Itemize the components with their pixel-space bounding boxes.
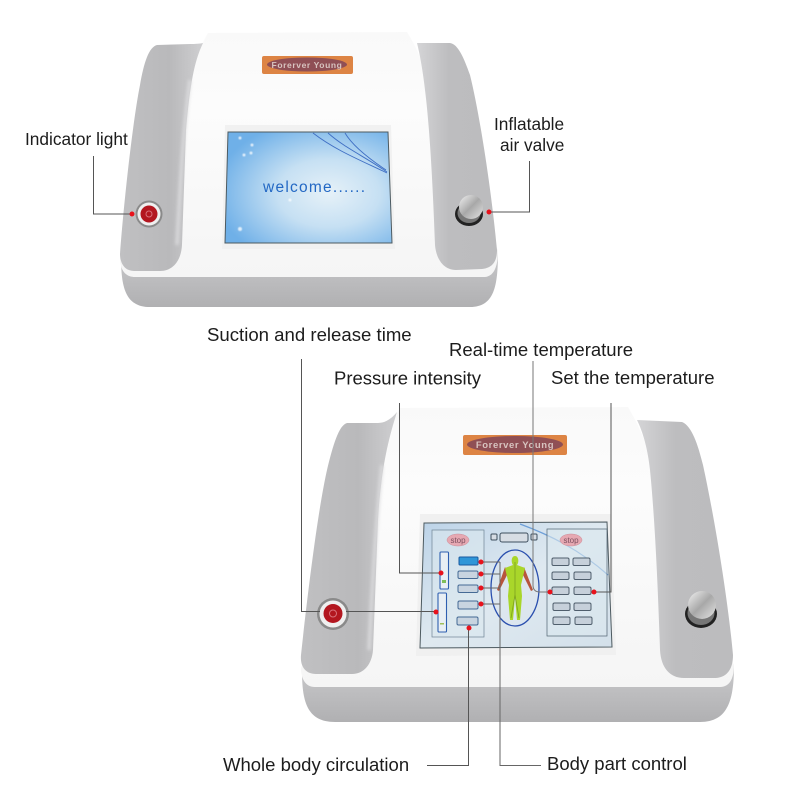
knob bbox=[685, 591, 717, 628]
callout dots bbox=[130, 210, 596, 630]
top centre controls bbox=[491, 533, 537, 542]
screen bezel bbox=[416, 514, 616, 656]
label: inflatable air valve: Inflatable bbox=[494, 114, 564, 134]
right stop button bbox=[560, 534, 582, 546]
left mode buttons bbox=[457, 557, 478, 625]
left stop button bbox=[447, 534, 469, 546]
screen swoosh lines bbox=[313, 133, 387, 173]
logo plate bbox=[262, 56, 353, 74]
right handle bbox=[417, 43, 497, 270]
right panel bbox=[547, 529, 607, 636]
sliders bbox=[438, 552, 448, 632]
logo plate bbox=[463, 435, 567, 455]
body oval bbox=[491, 550, 539, 626]
device white body bbox=[120, 32, 498, 277]
body figure bbox=[497, 556, 533, 620]
label: whole body circulation: Whole body circulation bbox=[223, 754, 409, 775]
label: real-time temperature: Real-time temperature bbox=[449, 339, 633, 360]
top device bbox=[120, 32, 498, 307]
label: pressure intensity: Pressure intensity bbox=[334, 368, 482, 388]
label: inflatable air valve: air valve bbox=[500, 135, 564, 155]
label: body part control: Body part control bbox=[547, 753, 687, 774]
left handle bbox=[120, 43, 203, 271]
right button grid bbox=[552, 558, 592, 624]
device base bbox=[121, 250, 498, 307]
welcome text: welcome...... bbox=[262, 179, 365, 196]
right handle bbox=[637, 420, 733, 678]
left handle highlight bbox=[177, 80, 190, 245]
left handle bbox=[301, 412, 397, 674]
logo plate: Forerver Young bbox=[476, 440, 554, 451]
left stop button: stop bbox=[450, 536, 466, 545]
device base bbox=[302, 665, 734, 722]
device white body bbox=[301, 407, 734, 687]
left panel bbox=[432, 530, 484, 637]
logo plate: Forerver Young bbox=[272, 60, 342, 70]
screen bbox=[420, 522, 612, 648]
bottom device bbox=[301, 407, 734, 722]
right stop button: stop bbox=[563, 536, 579, 545]
left handle highlight bbox=[369, 465, 382, 650]
label: indicator light: Indicator light bbox=[25, 129, 128, 149]
indicator light button bbox=[136, 200, 162, 228]
screen bezel bbox=[222, 125, 395, 249]
label: suction and release time: Suction and release time bbox=[207, 324, 412, 345]
callout lines bbox=[94, 156, 611, 766]
suction button bbox=[317, 598, 349, 630]
screen bbox=[225, 132, 392, 243]
air valve knob bbox=[455, 195, 483, 226]
label: set the temperature: Set the temperature bbox=[551, 367, 715, 388]
